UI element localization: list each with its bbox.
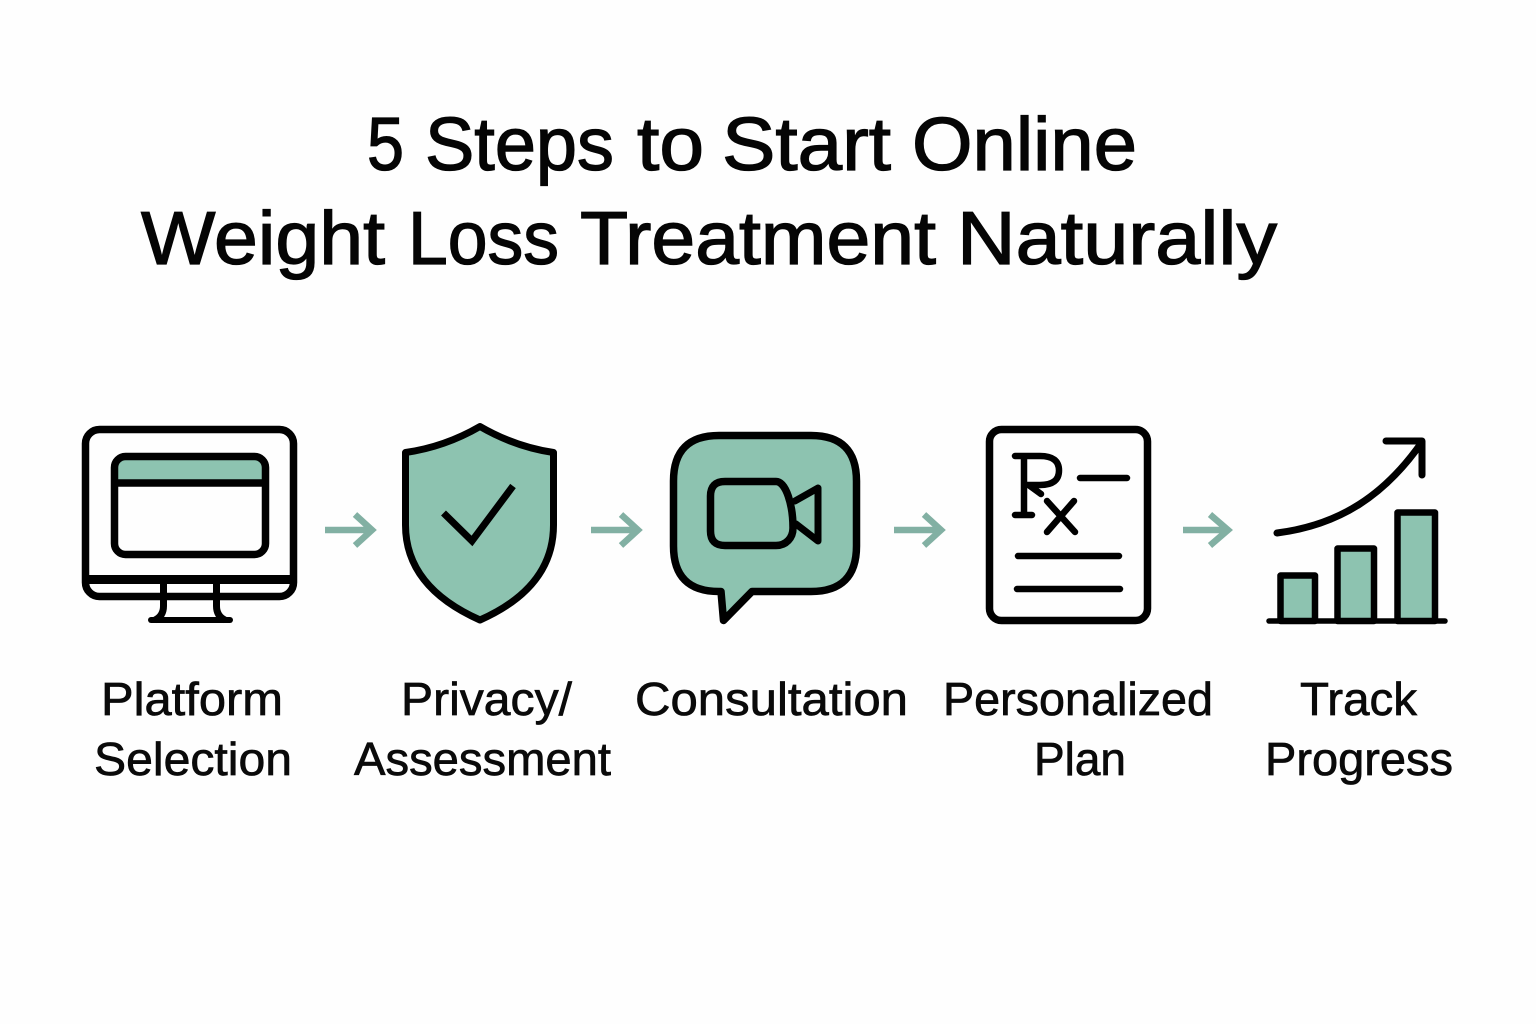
label: Privacy/ Assessment: Privacy/ xyxy=(401,673,572,725)
step 1: platform selection xyxy=(85,430,294,785)
arrow 1 xyxy=(325,514,372,546)
icon: desktop monitor xyxy=(85,430,294,620)
label: Personalized Plan xyxy=(943,673,1213,785)
label: Track Progress: Track xyxy=(1300,673,1418,725)
label: Personalized Plan: Plan xyxy=(1034,733,1126,785)
arrow 3 xyxy=(894,514,941,546)
title xyxy=(141,102,1278,280)
icon: video chat bubble xyxy=(674,436,856,620)
label: Consultation: Consultation xyxy=(635,673,908,725)
title: Online xyxy=(912,102,1137,186)
label: Track Progress xyxy=(1265,673,1453,785)
title: Loss xyxy=(408,196,559,280)
title: Treatment xyxy=(580,196,936,280)
title: Steps xyxy=(425,102,614,186)
step 2: privacy assessment xyxy=(354,426,611,785)
title: Weight xyxy=(141,196,385,280)
label: Track Progress: Progress xyxy=(1265,733,1453,785)
label: Privacy/ Assessment: Assessment xyxy=(354,733,611,785)
title: 5 xyxy=(367,102,404,186)
title: Naturally xyxy=(957,196,1278,280)
label: Platform Selection: Platform xyxy=(101,673,283,725)
step 3: consultation xyxy=(635,436,908,725)
step 5: track progress xyxy=(1265,441,1453,785)
title: to xyxy=(637,102,704,186)
label: Platform Selection xyxy=(94,673,292,785)
arrow 2 xyxy=(591,514,638,546)
step 4: personalized plan xyxy=(943,430,1213,785)
label: Personalized Plan: Personalized xyxy=(943,673,1213,725)
arrow 4 xyxy=(1183,514,1228,546)
icon: shield with check xyxy=(406,426,554,620)
label: Privacy/ Assessment xyxy=(354,673,611,785)
icon: prescription document xyxy=(990,430,1148,620)
title: Start xyxy=(722,102,891,186)
icon: rising bar chart xyxy=(1269,441,1445,621)
label: Platform Selection: Selection xyxy=(94,733,292,785)
